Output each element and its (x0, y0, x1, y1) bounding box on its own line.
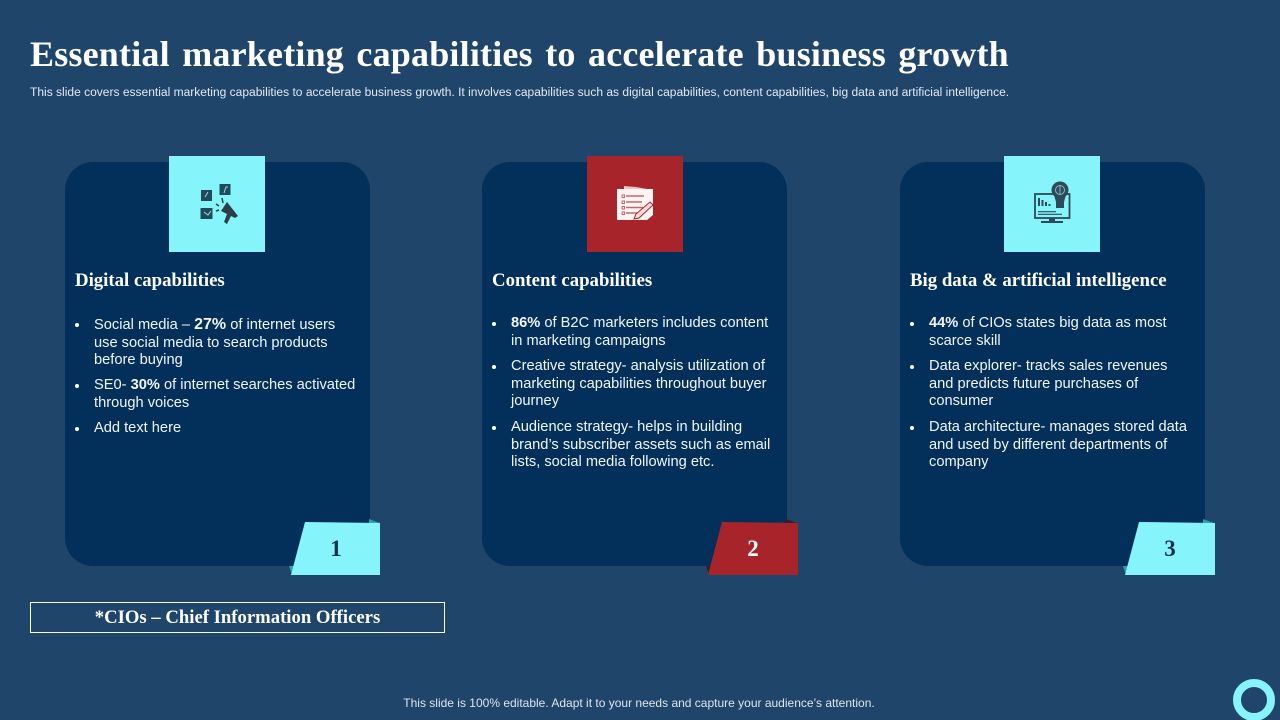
subtitle: This slide covers essential marketing capabilities to accelerate business growth. It involves capabilities such as digital capabilities, content capabilities, big data and artificial intelligence. (30, 85, 1009, 99)
bullet list: content capabilities: 86% of B2C marketers includes content (511, 315, 768, 331)
heading: content capabilities: Content capabilities (492, 270, 652, 291)
panel: content capabilities (482, 162, 787, 566)
bullet list: digital capabilities: Social media – 27% of internet users (94, 316, 335, 333)
bullet list: digital capabilities (75, 316, 355, 436)
number tab 2: 2 (747, 536, 759, 561)
bullet list: content capabilities: journey (511, 393, 559, 409)
bullet list: content capabilities: marketing capabilities throughout buyer (511, 376, 767, 392)
bullet list: big data and AI: scarce skill (929, 333, 1001, 349)
bullet list: content capabilities: lists, social media following etc. (511, 454, 714, 470)
bullet list: big data and AI: and used by different departments of (929, 437, 1167, 453)
footnote box (30, 602, 445, 633)
footnote box: *CIOs – Chief Information Officers (95, 607, 380, 628)
bullet list: big data and AI: 44% of CIOs states big data as most (929, 315, 1167, 331)
bullet list: content capabilities: brand’s subscriber assets such as email (511, 437, 770, 453)
bullet list: digital capabilities: before buying (94, 352, 183, 368)
number tab 1: 1 (330, 536, 342, 561)
heading: big data and AI: Big data & artificial intelligence (910, 270, 1167, 291)
bullet list: content capabilities: Audience strategy- helps in building (511, 419, 742, 435)
panel: digital capabilities (65, 162, 370, 566)
bullet list: big data and AI: Data explorer- tracks sales revenues (929, 358, 1167, 374)
bullet list: content capabilities: Creative strategy- analysis utilization of (511, 358, 765, 374)
heading: digital capabilities: Digital capabilities (75, 270, 225, 291)
bullet list: content capabilities: in marketing campaigns (511, 333, 666, 349)
bullet list: content capabilities (492, 315, 770, 470)
decorative ring (1233, 679, 1275, 720)
number tab 2 (706, 519, 798, 575)
bullet list: digital capabilities: SE0- 30% of internet searches activated (94, 377, 355, 393)
bullet list: digital capabilities: use social media to search products (94, 335, 328, 351)
icon: checklist and pencil (587, 156, 683, 252)
bullet list: big data and AI: company (929, 454, 988, 470)
footer text: This slide is 100% editable. Adapt it to your needs and capture your audience’s attention. (403, 696, 875, 710)
bullet list: digital capabilities: through voices (94, 395, 189, 411)
bullet list: big data and AI: consumer (929, 393, 993, 409)
number tab 3 (1123, 519, 1215, 575)
icon: social media megaphone (169, 156, 265, 252)
number tab 3: 3 (1164, 536, 1176, 561)
bullet list: big data and AI: Data architecture- manages stored data (929, 419, 1187, 435)
number tab 1 (289, 519, 380, 575)
icon: monitor with lightbulb (1004, 156, 1100, 252)
panel: big data and AI (900, 162, 1205, 566)
title: Essential marketing capabilities to accelerate business growth (30, 34, 1009, 74)
bullet list: big data and AI: and predicts future purchases of (929, 376, 1138, 392)
bullet list: big data and AI (910, 315, 1188, 470)
bullet list: digital capabilities: Add text here (94, 420, 181, 436)
